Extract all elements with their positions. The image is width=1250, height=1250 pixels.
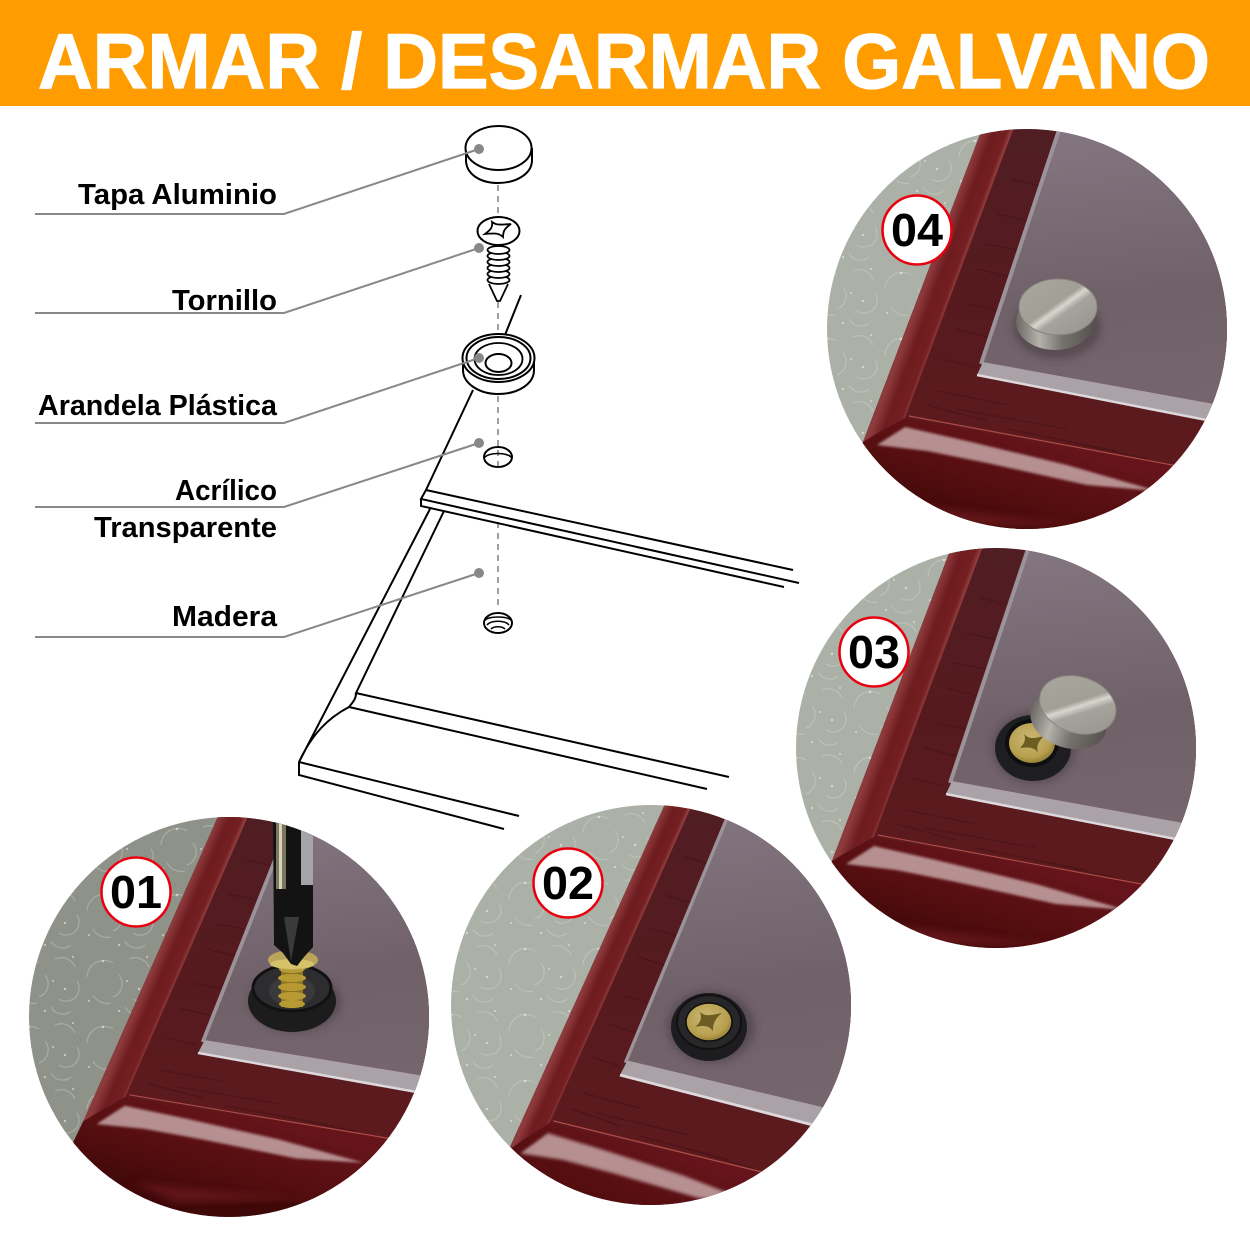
title: ARMAR / DESARMAR GALVANO (38, 17, 1210, 105)
callout: Acrilico Transparente (35, 438, 484, 544)
acrylic hole (484, 447, 512, 467)
step badge 01 (102, 858, 170, 926)
callout: Madera: Madera (172, 601, 278, 633)
callout: Arandela Plastica (35, 353, 484, 423)
acrylic sheet outline (421, 295, 799, 587)
callout: Tornillo (35, 243, 484, 317)
aluminium cap (466, 126, 532, 183)
step badge 03 (840, 618, 908, 686)
step 01 photo: screwing the screw (29, 817, 429, 1217)
step badge 04 (882, 196, 952, 264)
callout: Tapa Aluminio (35, 144, 484, 214)
step 04 photo: finished cap (827, 129, 1227, 529)
exploded diagram of the plaque (299, 126, 799, 829)
title banner (0, 0, 1250, 106)
wood screw hole (484, 613, 512, 633)
callout: Tapa Aluminio: Tapa Aluminio (78, 179, 277, 211)
callout: Madera (35, 568, 484, 637)
callout: Acrilico Transparente: Transparente (94, 512, 277, 544)
step 03 photo: placing the aluminium cap (796, 548, 1196, 948)
wood base outline (299, 509, 729, 829)
center axis dashed line (497, 185, 499, 610)
callout: Arandela Plastica: Arandela Plástica (38, 390, 278, 422)
step 02 photo: washer and screw installed (451, 805, 851, 1205)
screw (478, 217, 520, 301)
step badge 04: 04 (891, 204, 943, 256)
plastic washer (462, 334, 534, 394)
step badge 03: 03 (848, 626, 900, 678)
step badge 01: 01 (110, 866, 162, 918)
step badge 02 (534, 848, 602, 918)
callout: Tornillo: Tornillo (172, 285, 277, 317)
step badge 02: 02 (542, 857, 594, 909)
callout: Acrilico Transparente: Acrílico (175, 475, 277, 507)
